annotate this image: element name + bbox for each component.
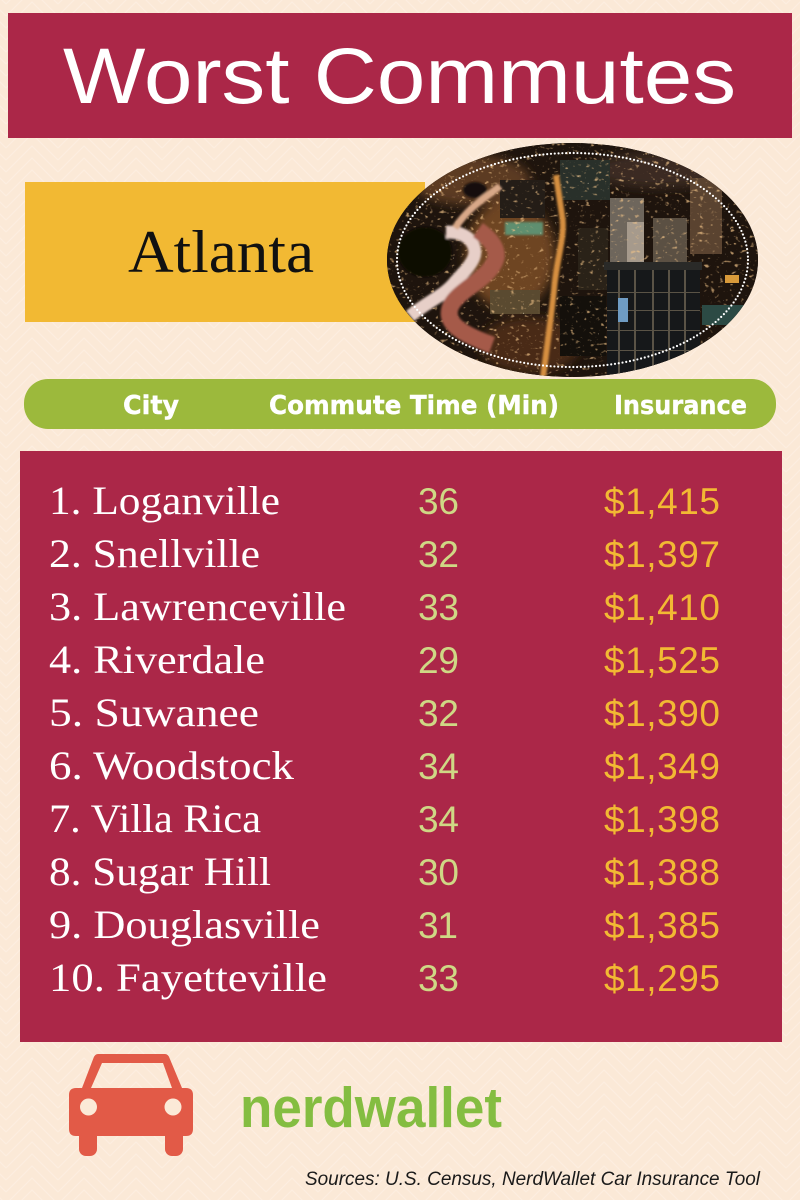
- row 5: 5. Suwanee: [49, 690, 259, 735]
- title: Worst Commutes: [63, 31, 736, 120]
- row 1: 36: [418, 481, 459, 522]
- row 2: [49, 531, 720, 576]
- row 6: 34: [418, 746, 459, 787]
- row 7: 34: [418, 799, 459, 840]
- column header bar: [24, 379, 776, 429]
- scattered window lights: [387, 143, 758, 377]
- sources note: Sources: U.S. Census, NerdWallet Car Insurance Tool: [305, 1169, 761, 1190]
- title banner: [8, 13, 792, 138]
- row 9: $1,385: [604, 905, 720, 946]
- row 6: 6. Woodstock: [49, 743, 294, 788]
- dark foreground tower: [607, 265, 700, 377]
- logo: nerdwallet: nerdwallet: [240, 1076, 502, 1140]
- row 4: 29: [418, 640, 459, 681]
- row 9: 31: [418, 905, 458, 946]
- row 10: $1,295: [604, 958, 720, 999]
- row 2: 32: [418, 534, 459, 575]
- header: commute time: Commute Time (Min): [269, 391, 559, 421]
- row 5: [49, 690, 720, 735]
- header: insurance: Insurance: [614, 391, 747, 421]
- row 9: [49, 902, 720, 947]
- city label panel: [25, 182, 425, 322]
- row 4: 4. Riverdale: [49, 637, 265, 682]
- photo: Atlanta highway at night in oval frame: [387, 143, 758, 377]
- row 1: 1. Loganville: [49, 478, 280, 523]
- tower blocks: [610, 198, 644, 262]
- row 8: 30: [418, 852, 459, 893]
- row 9: 9. Douglasville: [49, 902, 320, 947]
- warm city glow: [410, 152, 730, 373]
- row 2: 2. Snellville: [49, 531, 260, 576]
- dotted oval border: [397, 153, 748, 367]
- row 8: [49, 849, 720, 894]
- row 8: $1,388: [604, 852, 720, 893]
- row 6: $1,349: [604, 746, 720, 787]
- row 8: 8. Sugar Hill: [49, 849, 271, 894]
- row 5: $1,390: [604, 693, 720, 734]
- row 3: [49, 584, 720, 629]
- row 6: [49, 743, 720, 788]
- city name: Atlanta: [128, 219, 314, 285]
- row 10: [49, 955, 720, 1000]
- row 2: $1,397: [604, 534, 720, 575]
- row 1: $1,415: [604, 481, 720, 522]
- row 10: 10. Fayetteville: [49, 955, 327, 1000]
- highway light trails: [410, 232, 475, 316]
- row 1: [49, 478, 720, 523]
- dark water: [398, 227, 452, 277]
- row 4: [49, 637, 720, 682]
- header: city: City: [123, 391, 179, 421]
- row 7: [49, 796, 720, 841]
- row 3: $1,410: [604, 587, 720, 628]
- data table panel: [20, 451, 782, 1042]
- row 3: 33: [418, 587, 459, 628]
- icon: car: [69, 1054, 193, 1156]
- row 4: $1,525: [604, 640, 720, 681]
- row 7: $1,398: [604, 799, 720, 840]
- row 7: 7. Villa Rica: [49, 796, 261, 841]
- row 3: 3. Lawrenceville: [49, 584, 346, 629]
- row 5: 32: [418, 693, 459, 734]
- row 10: 33: [418, 958, 459, 999]
